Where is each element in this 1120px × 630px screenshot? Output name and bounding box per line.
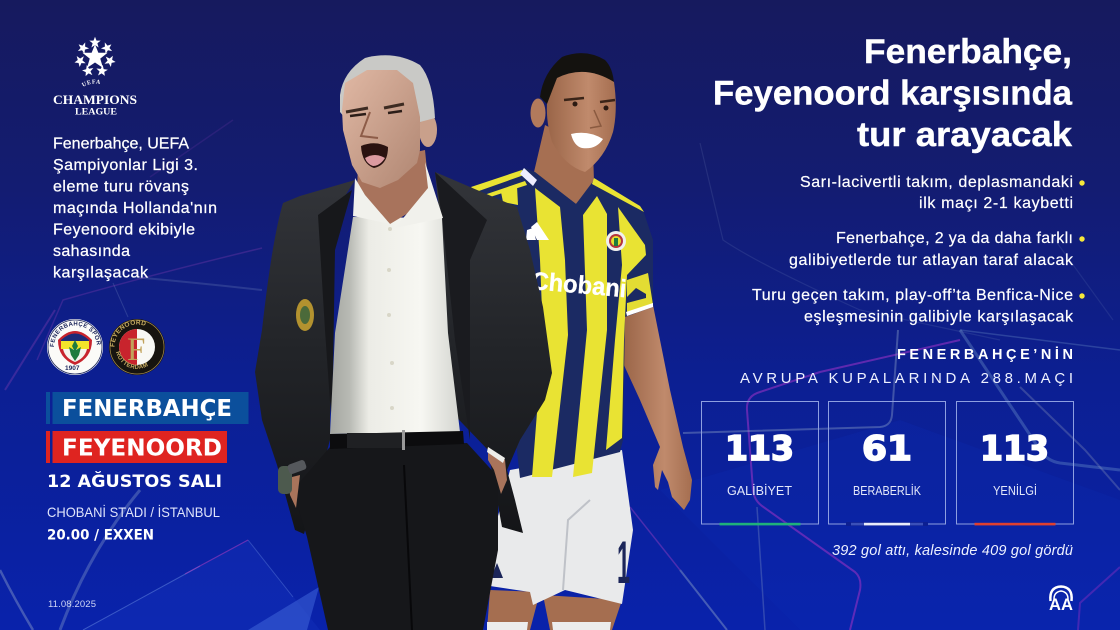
stat card: draws: 61 <box>862 429 912 469</box>
player: Fenerbahçe footballer <box>470 53 692 630</box>
stat card: wins: GALİBİYET <box>727 484 792 498</box>
goals note: 392 gol attı, kalesinde 409 gol gördü <box>832 543 1073 559</box>
icon: Feyenoord crest: F <box>127 332 145 368</box>
intro paragraph: sahasında <box>53 243 130 260</box>
belt <box>330 430 464 450</box>
title: Feyenoord karşısında <box>713 74 1073 112</box>
player neck and head <box>530 53 616 204</box>
player: Fenerbahçe footballer: 1 <box>617 529 630 596</box>
stat card: losses: YENİLGİ <box>993 484 1037 498</box>
point 1: ilk maçı 2-1 kaybetti <box>919 195 1073 212</box>
stat card: wins: 113 <box>725 429 794 469</box>
intro paragraph: Feyenoord ekibiyle <box>53 222 195 239</box>
team bar: Fenerbahçe: FENERBAHÇE <box>62 396 232 422</box>
stats heading <box>740 346 1073 387</box>
coach: José Mourinho <box>255 55 552 630</box>
icon: starball <box>73 37 117 79</box>
stats heading: FENERBAHÇE’NİN <box>897 346 1073 363</box>
point 2 <box>789 230 1085 269</box>
shirt buttons <box>387 227 394 410</box>
icon: Fenerbahçe crest: 1907 <box>65 365 80 372</box>
intro paragraph: karşılaşacak <box>53 264 149 282</box>
adidas logo on chest <box>526 222 549 240</box>
stats heading: AVRUPA KUPALARINDA 288.MAÇI <box>740 370 1073 387</box>
point 2: galibiyetlerde tur atlayan taraf alacak <box>789 252 1074 269</box>
white cuff and right hand <box>487 447 507 494</box>
stat card: losses: 113 <box>980 429 1049 469</box>
icon: Feyenoord crest: ROTTERDAM <box>116 351 148 369</box>
icon: Anadolu Agency logo: AA <box>1049 595 1073 614</box>
shirt <box>330 217 460 434</box>
neck <box>357 150 430 224</box>
point 2: Fenerbahçe, 2 ya da daha farklı <box>836 230 1073 247</box>
point 1: Sarı-lacivertli takım, deplasmandaki <box>800 174 1073 191</box>
intro paragraph: Fenerbahçe, UEFA <box>53 136 189 152</box>
stat card: draws: BERABERLİK <box>853 484 922 498</box>
stat card: losses <box>956 402 1074 525</box>
jacket crest <box>296 299 314 331</box>
stat card: draws <box>828 402 946 526</box>
head <box>340 55 437 188</box>
team bar: Fenerbahçe <box>46 392 248 424</box>
point 3: eşleşmesinin galibiyle karşılaşacak <box>804 308 1074 326</box>
player legs <box>487 590 622 630</box>
left hand and watch <box>278 459 307 508</box>
intro paragraph: eleme turu rövanş <box>53 178 189 196</box>
UEFA arc text: UEFA <box>82 80 100 86</box>
title <box>713 33 1073 154</box>
trousers <box>293 443 498 630</box>
jersey <box>470 168 653 478</box>
adidas logo on sleeve <box>627 288 646 303</box>
sponsor text: Chobani <box>530 267 628 303</box>
icon: Feyenoord crest: FEYENOORD <box>110 320 146 347</box>
icon: Anadolu Agency logo <box>1049 586 1073 614</box>
Champions League logo <box>53 36 137 116</box>
intro paragraph: Şampiyonlar Ligi 3. <box>53 157 198 174</box>
point 3 <box>752 287 1085 326</box>
title: Fenerbahçe, <box>864 33 1072 71</box>
title: tur arayacak <box>857 116 1072 154</box>
collar <box>353 162 443 228</box>
icon: Fenerbahçe crest <box>47 319 103 375</box>
point 1 <box>800 174 1085 212</box>
wordmark: LEAGUE: LEAGUE <box>75 106 117 116</box>
player right arm and hand <box>623 305 692 510</box>
player shorts <box>490 450 633 605</box>
match date: 12 AĞUSTOS SALI <box>47 470 222 492</box>
intro paragraph: maçında Hollanda'nın <box>53 200 217 217</box>
icon: Feyenoord crest <box>109 319 165 375</box>
stat card: wins <box>702 402 818 525</box>
kick-off time and channel: 20.00 / EXXEN <box>47 528 154 544</box>
team bar: Feyenoord: FEYENOORD <box>62 436 222 462</box>
key points <box>752 174 1085 326</box>
stadium: CHOBANİ STADI / İSTANBUL <box>47 503 220 520</box>
point 3: Turu geçen takım, play-off’ta Benfica-Nice <box>752 287 1073 304</box>
club badge on jersey <box>606 231 626 251</box>
jacket <box>255 172 552 534</box>
publication date: 11.08.2025 <box>48 599 96 610</box>
intro paragraph <box>53 136 217 282</box>
wordmark: CHAMPIONS: CHAMPIONS <box>53 92 137 107</box>
